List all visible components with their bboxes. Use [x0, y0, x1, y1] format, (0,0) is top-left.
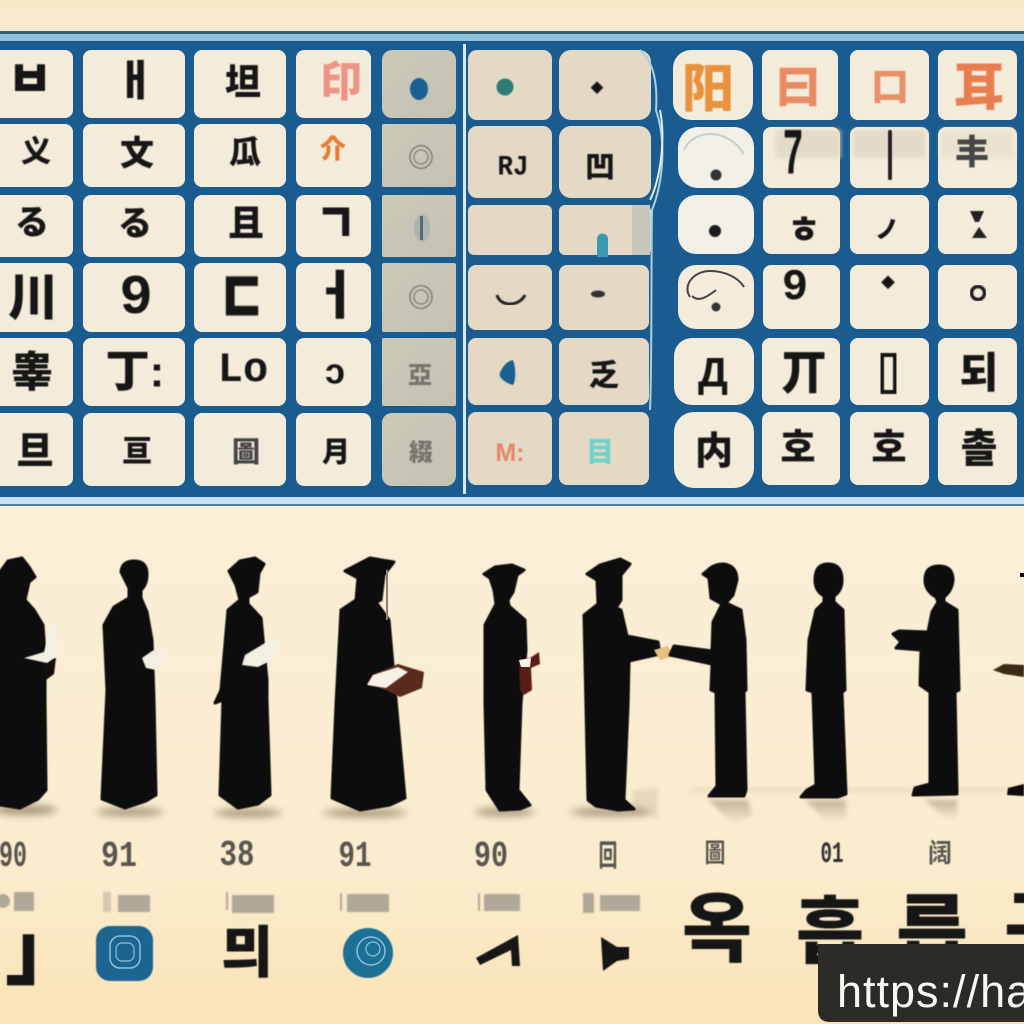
tile r4c1: 丁:	[106, 348, 164, 396]
grid frame	[0, 31, 1024, 506]
figure 4: graduate with open book	[332, 558, 424, 810]
icon: blue round badge	[343, 928, 393, 978]
tile r3c1	[83, 263, 185, 332]
tile r1c0: 义	[21, 136, 51, 168]
number labels row: 01	[820, 838, 844, 872]
tile r0c0	[0, 50, 73, 118]
number labels row: 回	[598, 841, 618, 876]
tile r0c6	[559, 50, 651, 120]
icon: black wedge	[476, 935, 520, 966]
tile r3c6	[559, 265, 649, 330]
tile r4c5	[468, 338, 552, 405]
icon: blue rounded badge	[96, 926, 153, 981]
tile r1c5: RJ	[498, 152, 528, 184]
tile r3c10	[938, 265, 1017, 329]
tile r0c7	[673, 50, 753, 120]
tile r4c0: 睾	[11, 348, 53, 396]
icon: black speaker wedge	[601, 937, 629, 971]
tile r3c8	[763, 263, 840, 329]
tile r3c8: 9	[782, 263, 808, 313]
number labels row: 90	[0, 836, 27, 877]
number labels row: 90	[474, 836, 508, 877]
tile r5c1	[83, 413, 185, 486]
tile r5c10: 촐	[961, 427, 997, 471]
tile r2c0: る	[15, 204, 49, 242]
tile r5c9: 호	[872, 428, 906, 470]
tile r4c4: 亞	[408, 362, 432, 390]
tile r0c7: 阳	[682, 61, 734, 119]
number labels row: 阔	[928, 839, 952, 870]
tile r1c10	[938, 127, 1017, 188]
number labels row: 91	[101, 836, 137, 877]
tile r0c0: ㅂ	[7, 52, 53, 108]
tile r3c3	[296, 263, 371, 332]
tile r2c9: ノ	[875, 216, 899, 244]
tile r3c9	[850, 265, 929, 329]
large glyph: circle bar corner: 옥	[682, 888, 752, 972]
tile r4c7	[674, 338, 754, 405]
tile r0c8: 曰	[775, 61, 821, 113]
tile r1c2: 瓜	[229, 134, 261, 170]
tile r5c2	[194, 413, 286, 486]
tile r0c8	[762, 50, 838, 120]
number labels row: 91	[338, 836, 372, 877]
tile r4c1	[83, 338, 185, 406]
tile r0c3	[296, 50, 371, 118]
large glyph: box with bars: 믜	[221, 922, 273, 984]
tile r5c2: 圖	[232, 436, 260, 468]
tile r1c4	[382, 124, 456, 187]
tile r2c4	[382, 195, 456, 257]
tile r5c8	[762, 412, 840, 485]
tile r1c1: 文	[120, 135, 154, 173]
tile r4c6: 乏	[589, 360, 619, 392]
figure 7: person with cap receiving	[670, 564, 746, 796]
figure 1: graduate with book	[0, 558, 59, 808]
tile r1c4: ◎	[408, 143, 434, 173]
figure 2: robed person with book	[102, 561, 165, 808]
tile r2c0	[0, 195, 73, 257]
curved divider	[640, 50, 662, 410]
tile r4c8: 丌	[781, 347, 827, 399]
ground shadows	[0, 805, 650, 817]
tile r4c3	[296, 338, 371, 406]
figure 5: person with hat and red book	[484, 565, 540, 810]
tile r5c4	[382, 413, 456, 486]
tile r0c2: 坦	[225, 62, 261, 102]
tile r1c8	[763, 119, 840, 193]
tile r5c8: 호	[781, 428, 815, 470]
number labels row: 圖	[704, 840, 726, 870]
tile r0c2	[194, 50, 286, 118]
tile r3c7	[678, 265, 754, 329]
tile r0c9	[850, 50, 929, 120]
tile r5c5	[468, 412, 552, 485]
tile r1c9	[850, 127, 929, 188]
tile r1c10: 丰	[955, 134, 989, 172]
tile r5c3	[296, 413, 371, 486]
large glyph: heavy stack: 릅	[896, 888, 968, 976]
tile r3c2	[194, 257, 286, 341]
tile r5c5: M:	[495, 439, 525, 467]
tile r1c1	[83, 124, 185, 187]
tile r4c10	[938, 338, 1017, 405]
tile r0c5	[468, 50, 552, 120]
tile r4c9	[850, 338, 929, 405]
tile r2c2	[194, 195, 286, 257]
panel: glyph keyboard grid	[0, 31, 1024, 506]
tile r1c5	[468, 126, 552, 198]
tile r4c7: Д	[698, 348, 728, 396]
tile r0c9: 口	[871, 67, 909, 109]
figure 6: person shaking hands	[584, 559, 674, 810]
tile r5c0	[0, 413, 73, 486]
tile r2c1: る	[118, 205, 152, 243]
tile r5c3: 月	[322, 436, 350, 468]
large glyph: corner: 」	[5, 906, 85, 994]
tile r4c2: Lo	[218, 346, 268, 394]
tile r2c9	[850, 195, 929, 254]
tile r4c6	[559, 338, 649, 405]
tile r0c1	[83, 50, 185, 118]
tile r3c0	[0, 263, 73, 332]
tile r1c3: 介	[320, 134, 346, 164]
tile r4c0	[0, 338, 73, 406]
tile r1c6: 凹	[585, 152, 615, 184]
watermark box	[818, 944, 1024, 1022]
tile r1c7	[678, 127, 754, 188]
tile r3c9: ◆	[881, 275, 895, 291]
large glyph: box stack: 흡	[796, 890, 864, 974]
tile r5c7	[674, 412, 754, 488]
tile r2c10	[938, 195, 1017, 254]
tile r1c3	[296, 124, 371, 187]
tile r5c6: 目	[586, 436, 614, 468]
tile r3c4	[382, 263, 456, 332]
tile r2c3: ㄱ	[316, 193, 356, 255]
tile r3c4: ◎	[408, 283, 434, 313]
tile r4c4	[382, 338, 456, 406]
tile r2c2: 且	[228, 202, 264, 244]
figure 10: partly cropped person	[993, 573, 1024, 796]
tile r0c6: ◆	[590, 80, 604, 96]
tile r5c7: 内	[695, 431, 733, 473]
tile r1c2	[194, 124, 286, 187]
tile r3c2: ㄷ	[217, 257, 267, 341]
tile r2c5	[468, 205, 552, 255]
tile r4c8	[762, 338, 840, 405]
tile r0c1: ㅐ	[116, 58, 154, 104]
tile r5c4: 綴	[409, 440, 433, 466]
figure 9: person with open hands	[893, 566, 959, 795]
tile r5c10	[938, 412, 1017, 485]
floor line and reflections	[632, 788, 1024, 825]
tile r4c2	[194, 338, 286, 406]
tile r4c10: 되	[960, 350, 998, 396]
tile r0c3: 印	[320, 58, 362, 106]
number labels row	[0, 835, 952, 877]
tile r2c8: ㅎ	[787, 210, 821, 250]
tile r2c3	[296, 193, 371, 257]
tile r2c7	[678, 195, 754, 254]
tile r4c3: ɔ	[325, 350, 345, 392]
tile r3c5	[468, 265, 552, 330]
tile r0c10	[938, 50, 1017, 120]
small caption bars	[0, 892, 640, 913]
tile r5c0: 旦	[16, 431, 54, 473]
figure 8: standing person	[801, 564, 846, 797]
tile r5c6	[559, 412, 649, 485]
tile r3c3: ㅓ	[311, 268, 359, 326]
tile r2c6	[559, 205, 651, 257]
figure 3: graduate with scroll	[215, 558, 280, 808]
tile r1c8: 7	[782, 119, 804, 193]
tile r3c1: 9	[119, 266, 153, 330]
tile r0c4	[382, 50, 456, 118]
tile r0c10: 耳	[954, 60, 1004, 116]
tile r3c0: 川	[8, 270, 58, 326]
tile r1c0	[0, 124, 73, 187]
tile r2c1	[83, 195, 185, 257]
tile r5c9	[850, 412, 929, 485]
tile r5c1: 亘	[122, 436, 152, 468]
tile r1c6	[559, 126, 651, 198]
tile r2c8	[763, 195, 840, 254]
number labels row: 38	[220, 835, 254, 876]
